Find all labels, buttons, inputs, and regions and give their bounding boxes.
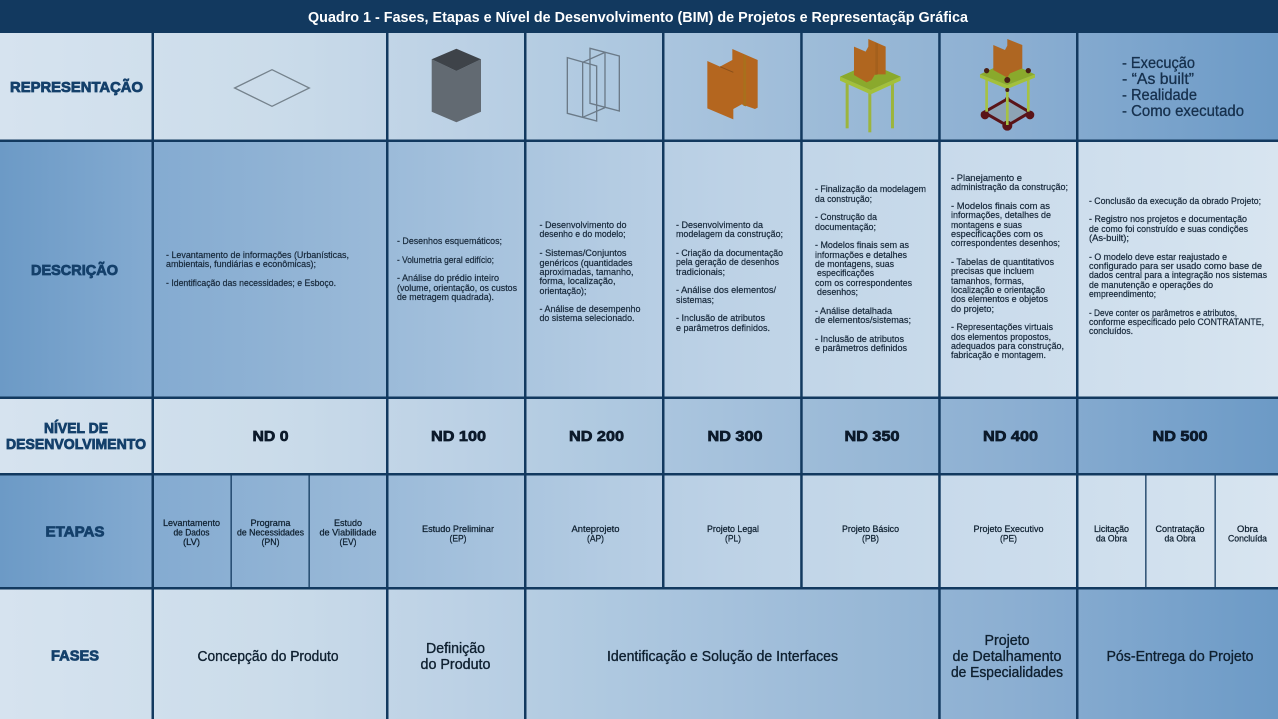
icon: ND 350 column on plate with legs <box>840 39 901 132</box>
cell: contratação da obra <box>1156 523 1204 544</box>
text: ND 350 description: informações e detalhes <box>815 250 907 260</box>
icon: ND 400 detailed column with bolts <box>980 39 1035 131</box>
cell: projeto legal <box>707 523 759 544</box>
text: ND 500 description <box>1089 196 1267 336</box>
text: ND 350 description: - Inclusão de atributos <box>815 334 904 344</box>
cell: definição do produto <box>420 641 490 673</box>
text: ND 200 description: forma, localização, <box>540 276 616 286</box>
cell: projeto de detalhamento de especialidades <box>951 633 1063 681</box>
title <box>0 0 1278 32</box>
cell: anteprojeto <box>572 523 620 544</box>
cell: contratação da obra: da Obra <box>1164 532 1196 544</box>
heading: nível de desenvolvimento: NÍVEL DE <box>44 420 108 437</box>
text: ND 350 description: - Modelos finais sem as <box>815 240 909 250</box>
cell: levantamento de dados: Levantamento <box>163 517 220 528</box>
text: ND 100 description <box>397 236 517 302</box>
icon: ND 0 diamond outline <box>235 70 309 106</box>
cell: estudo de viabilidade: Estudo <box>334 517 362 528</box>
text: ND 400 description: fabricação e montagem. <box>951 350 1046 360</box>
text: ND 300 description: - Análise dos elementos/ <box>676 285 776 295</box>
text: ND 350 description <box>815 184 926 353</box>
text: ND 200 description: aproximadas, tamanho, <box>540 267 634 277</box>
text: ND 300 description: - Criação da documentação <box>676 248 783 258</box>
text: ND 200 description: - Desenvolvimento do <box>540 220 626 230</box>
cell: anteprojeto: Anteprojeto <box>572 523 620 534</box>
text: ND 500 description: (As-built); <box>1089 233 1129 243</box>
text: ND 400 description: dos elementos propostos, <box>951 332 1051 342</box>
label: ND 350: ND 350 <box>844 429 900 445</box>
cell: estudo de viabilidade: (EV) <box>340 536 356 547</box>
text: ND 400 description: localização e orientação <box>951 285 1045 295</box>
text: ND 0 description <box>166 250 349 288</box>
cell: programa de necessidades: Programa <box>250 517 291 528</box>
text: ND 200 description: desenho e do modelo; <box>540 229 626 239</box>
row: nível de desenvolvimento <box>0 398 1278 473</box>
cell: projeto de detalhamento de especialidades: de Especialidades <box>951 665 1063 681</box>
cell: licitação da obra: Licitação <box>1094 523 1129 534</box>
text: ND 350 description: desenhos; <box>817 287 858 297</box>
text: execução list: - Realidade <box>1122 87 1197 104</box>
text: ND 300 description <box>676 220 783 333</box>
cell: levantamento de dados: de Dados <box>174 526 210 538</box>
cell: anteprojeto: (AP) <box>587 532 604 544</box>
cell: obra concluída: Obra <box>1237 523 1259 534</box>
text: ND 400 description: do projeto; <box>951 304 994 314</box>
cell: concepção do produto: Concepção do Produto <box>198 649 338 665</box>
icon: ND 100 solid block <box>432 49 481 122</box>
cell: projeto legal: (PL) <box>725 532 741 544</box>
text: ND 400 description: - Planejamento e <box>951 173 1022 183</box>
cell: definição do produto: do Produto <box>420 657 490 673</box>
icon: ND 300 steel column <box>707 49 758 119</box>
cell: projeto básico <box>842 523 899 544</box>
text: ND 500 description: - Deve conter os parâmetros e atributos, <box>1089 308 1237 318</box>
text: ND 500 description: conforme especificado pelo CONTRATANTE, <box>1089 317 1264 327</box>
text: ND 200 description: - Análise de desempenho <box>540 304 640 314</box>
text: ND 200 description <box>540 220 640 323</box>
label: ND 500: ND 500 <box>1152 429 1208 445</box>
text: ND 300 description: sistemas; <box>676 295 714 305</box>
cell: definição do produto: Definição <box>426 641 485 657</box>
cell: estudo preliminar <box>422 523 494 544</box>
cell: projeto de detalhamento de especialidades: Projeto <box>984 633 1030 649</box>
text: ND 400 description: correspondentes desenhos; <box>951 238 1060 248</box>
text: ND 500 description: - Conclusão da execução da obrado Projeto; <box>1089 196 1261 206</box>
text: ND 400 description: - Tabelas de quantitativos <box>951 257 1054 267</box>
text: ND 500 description: - O modelo deve estar reajustado e <box>1089 252 1227 262</box>
cell: estudo preliminar: Estudo Preliminar <box>422 523 494 534</box>
text: ND 0 description: ambientais, fundiárias e econômicas); <box>166 259 316 269</box>
cell: programa de necessidades: de Necessidades <box>237 526 304 538</box>
title: Quadro 1 - Fases, Etapas e Nível de Desenvolvimento (BIM) de Projetos e Representaçãp Gráfica <box>308 10 969 26</box>
label: ND 0: ND 0 <box>252 429 288 445</box>
text: ND 350 description: - Análise detalhada <box>815 306 893 316</box>
text: ND 200 description: orientação); <box>540 286 586 296</box>
text: ND 200 description: genéricos (quantidades <box>540 258 633 268</box>
text: ND 500 description: de manutenção e operações do <box>1089 280 1213 290</box>
text: execução list: - Execução <box>1122 55 1195 72</box>
text: ND 300 description: - Desenvolvimento da <box>676 220 764 230</box>
text: ND 400 description: dos elementos e objetos <box>951 294 1048 304</box>
text: ND 100 description: - Desenhos esquemáticos; <box>397 236 502 246</box>
text: execução list <box>1122 55 1244 120</box>
cell: estudo de viabilidade <box>320 517 376 547</box>
text: ND 500 description: de como foi construído e suas condições <box>1089 224 1248 234</box>
text: ND 350 description: com os correspondentes <box>815 278 912 288</box>
heading: representação: REPRESENTAÇÃO <box>10 78 143 96</box>
cell: projeto básico: Projeto Básico <box>842 523 899 534</box>
cell: licitação da obra: da Obra <box>1096 532 1128 544</box>
text: ND 400 description: informações, detalhes de <box>951 210 1051 220</box>
text: ND 300 description: tradicionais; <box>676 267 725 277</box>
text: ND 300 description: pela geração de desenhos <box>676 257 779 267</box>
text: ND 350 description: de elementos/sistemas; <box>815 315 911 325</box>
cell: estudo preliminar: (EP) <box>450 532 466 544</box>
text: ND 400 description: tamanhos, formas, <box>951 276 1024 286</box>
label: ND 400: ND 400 <box>983 429 1038 445</box>
text: ND 400 description: precisas que incluem <box>951 266 1034 276</box>
text: ND 300 description: - Inclusão de atributos <box>676 313 765 323</box>
text: ND 100 description: de metragem quadrada). <box>397 292 494 302</box>
text: ND 400 description: - Representações virtuais <box>951 322 1053 332</box>
label: ND 100: ND 100 <box>431 429 486 445</box>
text: ND 350 description: especificações <box>817 268 874 278</box>
text: ND 500 description: empreendimento; <box>1089 289 1156 299</box>
text: ND 400 description: - Modelos finais com as <box>951 201 1050 211</box>
text: ND 400 description <box>951 173 1068 360</box>
text: ND 0 description: - Identificação das necessidades; e Esboço. <box>166 278 336 288</box>
cell: projeto executivo: (PE) <box>1000 532 1017 544</box>
cell: projeto de detalhamento de especialidades: de Detalhamento <box>952 649 1062 665</box>
text: ND 350 description: da construção; <box>815 194 872 204</box>
cell: identificação e solução de interfaces: Identificação e Solução de Interfaces <box>607 649 838 665</box>
cell: obra concluída: Concluída <box>1228 532 1268 544</box>
text: ND 400 description: adequados para construção, <box>951 341 1064 351</box>
row: etapas <box>0 475 1278 587</box>
text: ND 500 description: configurado para ser usado como base de <box>1089 261 1262 271</box>
label: ND 300: ND 300 <box>708 429 762 445</box>
cell: programa de necessidades <box>237 517 304 547</box>
text: ND 200 description: do sistema selecionado. <box>540 313 634 323</box>
cell: levantamento de dados: (LV) <box>183 536 200 547</box>
text: execução list: - “As built” <box>1122 71 1194 88</box>
cell: projeto executivo <box>974 523 1044 544</box>
text: execução list: - Como executado <box>1122 103 1244 120</box>
cell: obra concluída <box>1228 523 1268 544</box>
heading: descrição: DESCRIÇÃO <box>31 261 118 279</box>
cell: projeto legal: Projeto Legal <box>707 523 759 534</box>
heading: etapas: ETAPAS <box>46 524 104 540</box>
text: ND 350 description: e parâmetros definidos <box>815 343 907 353</box>
text: ND 300 description: e parâmetros definidos. <box>676 323 770 333</box>
text: ND 350 description: - Construção da <box>815 212 878 222</box>
heading: nível de desenvolvimento <box>6 420 146 453</box>
text: ND 0 description: - Levantamento de informações (Urbanísticas, <box>166 250 349 260</box>
cell: estudo de viabilidade: de Viabilidade <box>320 526 376 538</box>
text: ND 350 description: de montagens, suas <box>815 259 894 269</box>
label: ND 200: ND 200 <box>569 429 624 445</box>
text: ND 400 description: especificações com os <box>951 229 1043 239</box>
row: representação <box>0 33 1278 140</box>
cell: contratação da obra: Contratação <box>1156 523 1204 534</box>
text: ND 100 description: (volume, orientação, os custos <box>397 283 517 293</box>
cell: levantamento de dados <box>163 517 220 547</box>
text: ND 300 description: modelagem da construção; <box>676 229 783 239</box>
text: ND 350 description: documentação; <box>815 222 876 232</box>
row: fases <box>0 590 1278 719</box>
text: ND 100 description: - Volumetria geral edifício; <box>397 255 494 265</box>
text: ND 200 description: - Sistemas/Conjuntos <box>540 248 627 258</box>
text: ND 400 description: montagens e suas <box>951 220 1022 230</box>
text: ND 500 description: - Registro nos projetos e documentação <box>1089 214 1247 224</box>
cell: pós-entrega do projeto: Pós-Entrega do Projeto <box>1106 649 1254 665</box>
cell: programa de necessidades: (PN) <box>262 536 280 547</box>
cell: projeto executivo: Projeto Executivo <box>974 523 1044 534</box>
cell: projeto básico: (PB) <box>862 532 879 544</box>
cell: licitação da obra <box>1094 523 1129 544</box>
row: descrição <box>0 142 1278 396</box>
heading: nível de desenvolvimento: DESENVOLVIMENTO <box>6 436 146 453</box>
icon: ND 200 wireframe column <box>567 48 619 121</box>
text: ND 500 description: dados central para a integração nos sistemas <box>1089 270 1267 280</box>
text: ND 350 description: - Finalização da modelagem <box>815 184 926 194</box>
text: ND 400 description: administração da construção; <box>951 182 1068 192</box>
heading: fases: FASES <box>51 648 99 664</box>
text: ND 100 description: - Análise do prédio inteiro <box>397 273 499 283</box>
text: ND 500 description: concluídos. <box>1089 326 1133 336</box>
